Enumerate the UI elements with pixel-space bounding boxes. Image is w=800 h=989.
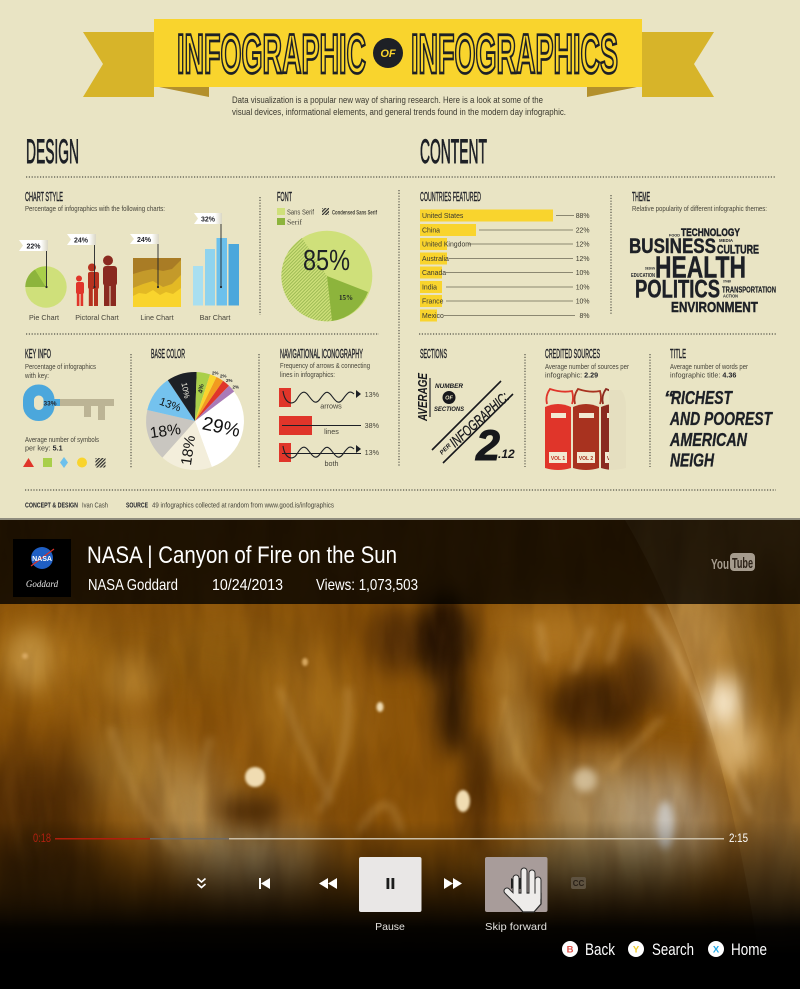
icon: key: 33%	[43, 400, 57, 408]
hint: back: Back	[585, 940, 615, 959]
panel: countries featured: Mexico	[422, 313, 444, 320]
panel: theme word cloud: BUSINESS	[629, 234, 716, 258]
panel: chart style	[19, 190, 239, 322]
lines row	[279, 416, 380, 436]
panel: theme word cloud: MEDIA	[719, 238, 734, 243]
progress bar	[33, 831, 748, 845]
icon: skip to start	[259, 878, 270, 889]
icon: NASA Goddard tile: Goddard	[26, 579, 59, 589]
line chart: 24%	[137, 237, 152, 244]
panel: theme word cloud: ENVIRONMENT	[671, 299, 758, 316]
panel: countries featured: 10%	[576, 284, 590, 292]
line chart	[130, 234, 181, 322]
base color pie chart: 10%	[179, 382, 192, 399]
panel: theme word cloud: CULTURE	[717, 244, 759, 256]
panel: base color	[146, 347, 244, 470]
panel: countries featured: COUNTRIES FEATURED	[420, 190, 481, 204]
video metadata: NASA Goddard	[88, 577, 178, 594]
arrows row	[279, 388, 380, 410]
base color pie chart	[146, 370, 244, 470]
base color pie chart: 2%	[226, 378, 233, 383]
base color pie chart: 2%	[232, 384, 239, 390]
panel: navigational iconography	[279, 347, 380, 468]
lines row: lines	[324, 427, 339, 436]
panel: countries featured: Canada	[422, 270, 446, 277]
control labels	[375, 921, 547, 933]
panel: key info: Percentage of infographics	[25, 362, 96, 371]
title banner: OF	[380, 48, 396, 60]
pictorial chart	[67, 234, 119, 322]
title words sample	[664, 387, 773, 470]
hint: search: Y	[633, 944, 640, 956]
icon: fast forward	[444, 878, 462, 889]
arrows row: arrows	[320, 402, 342, 410]
text: CONTENT	[420, 133, 487, 171]
credits	[25, 502, 334, 510]
control labels: Pause	[375, 921, 405, 933]
sections typography art: INFOGRAPHIC:	[447, 390, 513, 451]
control labels: Skip forward	[485, 921, 547, 933]
icon: YouTube logo: Tube	[732, 555, 753, 572]
panel: countries featured: United States	[422, 213, 464, 220]
panel: theme word cloud: TRANSPORTATION	[722, 284, 776, 294]
progress bar: 2:15	[729, 831, 748, 845]
panel: countries featured: 8%	[580, 313, 590, 320]
bright spots	[22, 653, 470, 812]
bar chart: Bar Chart	[200, 313, 230, 322]
panel: font	[277, 190, 378, 321]
icon: rewind	[319, 878, 337, 889]
credits: Ivan Cash	[82, 502, 108, 510]
panel: credited sources	[545, 347, 631, 474]
infographic background panel	[0, 0, 800, 518]
panel: countries featured: Australia	[422, 256, 449, 263]
panel: key info: per key: 5.1	[25, 444, 63, 452]
panel: countries featured: 22%	[576, 228, 590, 234]
sections typography art: NUMBER	[435, 384, 464, 390]
video title: NASA | Canyon of Fire on the Sun	[87, 542, 397, 569]
base color pie chart: 13%	[158, 396, 183, 415]
panel: navigational iconography: NAVIGATIONAL ICONOGRAPHY	[280, 347, 363, 361]
panel: countries featured: China	[422, 228, 440, 234]
intro text: Data visualization is a popular new way of sharing research. Here is a look at some of the	[232, 95, 543, 105]
panel: title: infographic title: 4.36	[670, 370, 736, 380]
font pie chart	[281, 231, 372, 321]
pause button	[359, 857, 422, 912]
panel: countries featured: 10%	[576, 298, 590, 306]
base color pie chart: 18%	[178, 434, 199, 466]
panel: credited sources: Average number of sources per	[545, 362, 629, 371]
panel: countries featured: 10%	[576, 270, 590, 277]
video metadata: 10/24/2013	[212, 577, 283, 594]
panel: title: TITLE	[670, 347, 686, 361]
both row: both	[324, 459, 338, 468]
hint: back: B	[567, 944, 574, 956]
panel: font: FONT	[277, 190, 292, 204]
line chart: Line Chart	[140, 313, 174, 322]
panel: theme word cloud: ACTION	[723, 294, 738, 298]
title words sample: “	[664, 387, 674, 408]
sections typography art: SECTIONS	[434, 407, 464, 413]
pie chart	[19, 240, 67, 322]
sections typography art: .12	[498, 447, 515, 461]
panel: key info: Average number of symbols	[25, 435, 99, 444]
panel: theme word cloud: TECHNOLOGY	[681, 227, 740, 239]
panel: key info	[23, 347, 114, 468]
panel: countries featured	[420, 190, 590, 322]
video info overlay	[0, 520, 800, 604]
font pie chart: 85%	[303, 245, 350, 277]
bar chart: 32%	[201, 216, 216, 224]
bottom fade	[0, 820, 800, 955]
panel: countries featured: 12%	[576, 242, 590, 248]
loop fans	[112, 625, 660, 850]
icon: books	[545, 386, 631, 474]
player controls	[198, 857, 586, 933]
base color pie chart: 29%	[200, 413, 242, 442]
icon: NASA Goddard tile	[13, 539, 71, 597]
both row	[279, 443, 380, 468]
icon: NASA Goddard tile: NASA	[32, 556, 52, 563]
credits: CONCEPT & DESIGN	[25, 502, 78, 510]
base color pie chart: 2%	[212, 370, 219, 376]
panel: countries featured: India	[422, 284, 437, 292]
panel: countries featured: United Kingdom	[422, 242, 471, 248]
text: DESIGN	[26, 133, 79, 171]
panel: theme word cloud: Relative popularity of different infographic themes:	[632, 204, 767, 213]
intro text: visual devices, informational elements, and general trends found in the modern day infographic.	[232, 107, 566, 117]
panel: credited sources: CREDITED SOURCES	[545, 347, 600, 361]
panel: countries featured: France	[422, 298, 444, 306]
panel: navigational iconography: lines in infographics:	[280, 370, 335, 379]
lines row: 38%	[365, 421, 380, 430]
credits: SOURCE	[126, 502, 148, 510]
hint: search: Search	[652, 940, 694, 959]
pictorial chart: 24%	[74, 238, 89, 244]
panel: key info: with key:	[24, 371, 49, 380]
font legend	[277, 208, 378, 226]
sections typography art: 2	[475, 422, 500, 470]
panel: base color: BASE COLOR	[151, 347, 185, 361]
base color pie chart: 4%	[197, 383, 206, 394]
bar chart	[193, 213, 239, 322]
panel: countries featured: 12%	[576, 256, 590, 263]
title words sample: RICHEST	[671, 387, 733, 408]
panel: theme word cloud	[629, 190, 776, 316]
title banner	[83, 19, 714, 97]
icon: books: VOL 2	[579, 456, 593, 462]
panel: chart style: Percentage of infographics with the following charts:	[25, 204, 165, 213]
panel: title: Average number of words per	[670, 362, 748, 371]
panel: theme word cloud: HEALTH	[655, 250, 746, 284]
hint: back	[562, 940, 615, 959]
panel: key info: KEY INFO	[25, 347, 51, 361]
base color pie chart: 2%	[220, 374, 227, 378]
sections typography art: PER	[439, 442, 453, 456]
video header	[13, 539, 755, 597]
panel: theme word cloud: FOOD	[669, 232, 680, 238]
panel: sections: SECTIONS	[420, 347, 447, 361]
panel: countries featured: 88%	[576, 213, 590, 220]
sections typography art: AVERAGE	[415, 373, 430, 422]
base color pie chart: 18%	[149, 421, 182, 442]
intro text	[232, 95, 566, 117]
sections typography art	[415, 373, 515, 470]
panel: theme word cloud: THEME	[632, 190, 650, 204]
icon: books: VOL 3	[607, 456, 621, 462]
font pie chart: 15%	[339, 294, 353, 302]
pictorial chart: Pictoral Chart	[75, 313, 119, 322]
icon: books: VOL 1	[551, 456, 565, 462]
font legend: Serif	[287, 218, 303, 226]
hint: home: Home	[731, 940, 767, 959]
panel: credited sources: infographic: 2.29	[545, 370, 598, 380]
panel: theme word cloud: DESIGN	[645, 266, 655, 270]
pie chart: Pie Chart	[29, 313, 59, 322]
pie chart: 22%	[26, 244, 41, 250]
panel: title	[664, 347, 773, 470]
arrows row: 13%	[365, 390, 380, 399]
title words sample: AMERICAN	[669, 429, 747, 450]
turbulence streaks	[0, 604, 798, 883]
hint: home	[708, 940, 767, 959]
title words sample: NEIGH	[670, 450, 714, 470]
dark filament and coronal hole	[8, 594, 664, 850]
title banner: INFOGRAPHIC	[177, 22, 366, 85]
icon: chevrons down	[198, 878, 206, 888]
sun limb glow	[667, 604, 800, 894]
panel: sections	[415, 347, 515, 470]
icon: hand cursor	[507, 871, 541, 912]
hint: home: X	[713, 944, 720, 956]
panel: navigational iconography: Frequency of arrows & connecting	[280, 361, 370, 370]
icon: closed captions: CC	[573, 879, 584, 888]
font legend: Condensed Sans Serif	[332, 210, 378, 216]
gamepad hints	[562, 940, 767, 959]
panel: theme word cloud: EDUCATION	[631, 273, 655, 279]
hint: search	[628, 940, 694, 959]
video frame: sun image	[0, 520, 800, 927]
icon: YouTube logo: You	[711, 556, 729, 573]
key symbols	[23, 457, 106, 468]
panel: theme word cloud: POLITICS	[635, 276, 720, 304]
font legend: Sans Serif	[287, 210, 314, 216]
credits: 49 infographics collected at random from www.good.is/infographics	[152, 502, 334, 510]
video metadata	[88, 577, 418, 594]
sections typography art: OF	[445, 396, 453, 402]
video metadata: Views: 1,073,503	[316, 577, 418, 594]
panel: theme word cloud: OTHER	[723, 280, 731, 284]
icon: YouTube logo	[711, 553, 755, 573]
skip forward button	[485, 857, 548, 912]
panel: chart style: CHART STYLE	[25, 190, 63, 204]
progress bar: 0:18	[33, 831, 51, 845]
both row: 13%	[365, 448, 380, 457]
icon: closed captions	[571, 877, 586, 889]
